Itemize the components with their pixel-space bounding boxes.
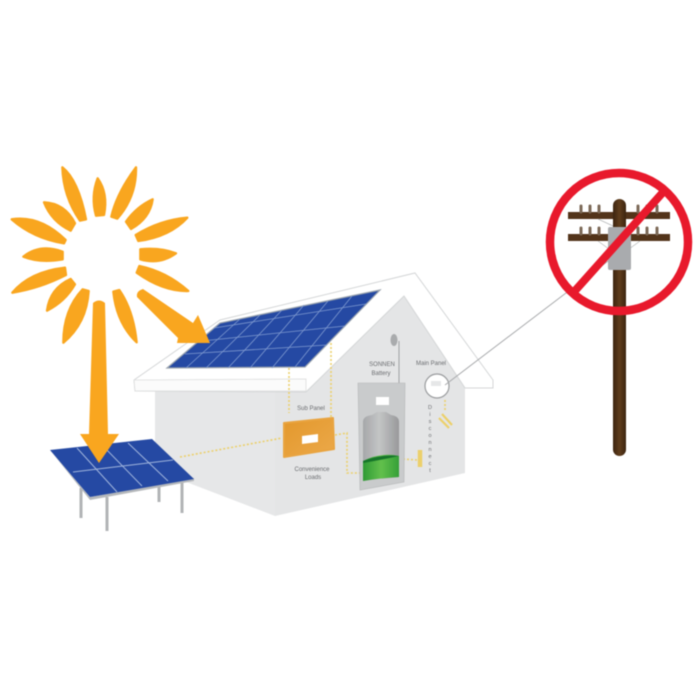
sub panel box: [284, 418, 334, 457]
disconnect label: s: [429, 419, 432, 425]
disconnect label: n: [428, 447, 432, 453]
utility pole: [568, 199, 670, 456]
disconnect label: n: [428, 440, 432, 446]
label: sub panel: Sub Panel: [297, 406, 325, 412]
insulators: [581, 206, 657, 234]
ground solar panel: [50, 439, 194, 531]
disconnect label: c: [429, 426, 432, 432]
crossarms: [568, 212, 670, 241]
label: convenience loads: Loads: [305, 475, 321, 481]
disconnect label: c: [429, 461, 432, 467]
arrow: to roof panel: [137, 289, 210, 343]
label: battery: SONNEN: [369, 362, 395, 368]
battery cabinet: [358, 383, 405, 490]
disconnect label: o: [428, 433, 432, 439]
roof: [134, 273, 493, 392]
roof solar panel: [167, 290, 380, 368]
label: main panel: Main Panel: [416, 361, 446, 367]
disconnect label: e: [428, 454, 432, 460]
label: convenience loads: Convenience: [294, 467, 330, 473]
pole shaft: [613, 199, 626, 456]
disconnect switch: [439, 414, 452, 428]
panel legs: [81, 480, 182, 531]
antenna: [390, 334, 399, 384]
battery charge: [363, 455, 399, 481]
battery switch: [418, 450, 422, 467]
dotted wiring: [180, 343, 445, 473]
disconnect label: i: [429, 412, 431, 418]
arrow: down to ground panel: [80, 300, 119, 463]
battery cell: [363, 412, 399, 481]
main panel meter: [425, 374, 449, 398]
transformer: [608, 227, 631, 270]
label: battery: Battery: [371, 371, 391, 377]
braces: [598, 219, 640, 252]
no-grid symbol: [550, 173, 688, 311]
gable wall: [275, 293, 465, 516]
disconnect label: t: [429, 468, 431, 474]
house: [134, 273, 493, 516]
disconnect label: D: [428, 405, 432, 411]
left wall: [155, 390, 290, 516]
sun: [12, 167, 188, 343]
service wire: [445, 258, 612, 385]
